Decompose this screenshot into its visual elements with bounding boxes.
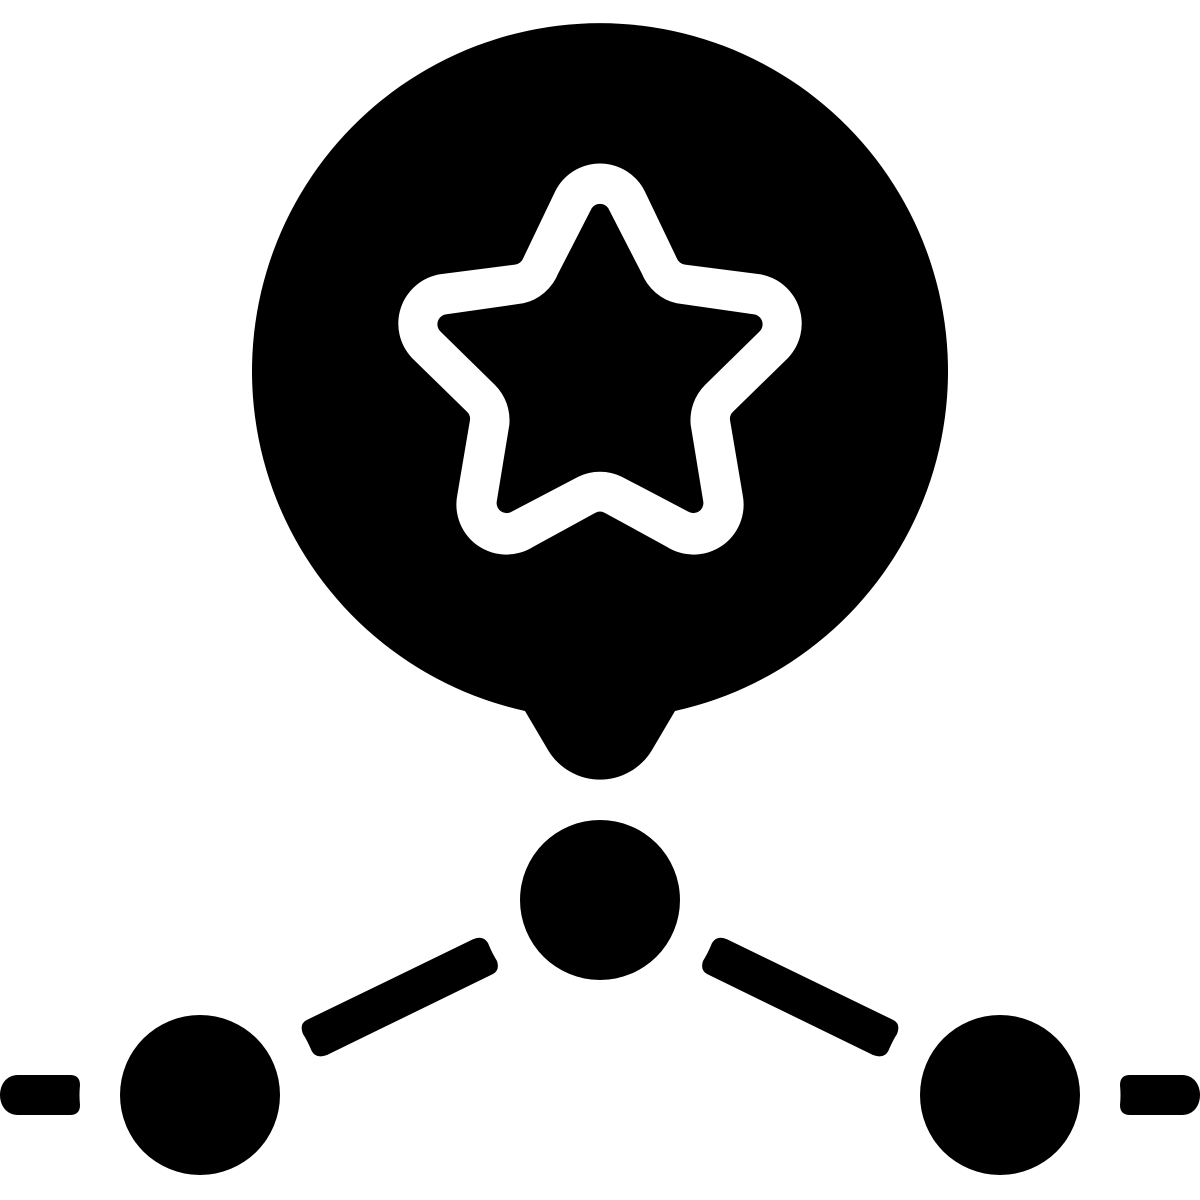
pin body [252, 23, 948, 780]
connector: far left dash [0, 1075, 80, 1115]
star inner [437, 204, 763, 513]
icon: location pin bubble [252, 23, 948, 780]
node: center [520, 820, 680, 980]
star outline [398, 163, 802, 555]
connector: right diagonal [702, 938, 898, 1056]
node: right [920, 1015, 1080, 1175]
network path [0, 820, 1200, 1175]
node: left [120, 1015, 280, 1175]
connector: left diagonal [302, 938, 498, 1056]
connector: far right dash [1120, 1075, 1200, 1115]
